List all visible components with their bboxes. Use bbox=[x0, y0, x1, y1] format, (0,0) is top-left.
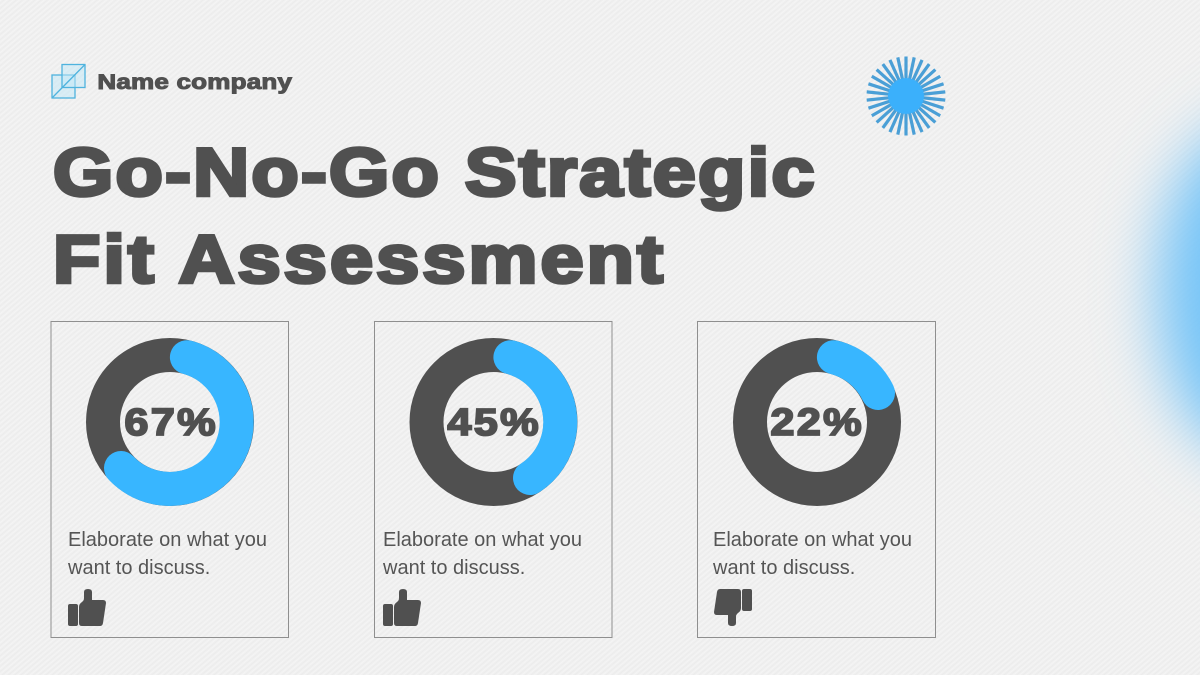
blue glow bbox=[1158, 120, 1200, 460]
description bbox=[382, 529, 582, 579]
donut chart: 22% bbox=[750, 355, 884, 489]
donut chart: 67% bbox=[103, 355, 237, 489]
title bbox=[53, 135, 815, 297]
company name: Name company bbox=[97, 71, 293, 94]
panel: 67% bbox=[51, 322, 288, 638]
description: Elaborate on what you bbox=[713, 529, 912, 551]
description: want to discuss. bbox=[382, 557, 525, 579]
description bbox=[712, 529, 912, 579]
panel: 45% bbox=[374, 322, 612, 638]
description bbox=[67, 529, 267, 579]
description: Elaborate on what you bbox=[383, 529, 582, 551]
title: Go-No-Go Strategic bbox=[53, 135, 815, 210]
donut chart: 22%: 22% bbox=[770, 400, 862, 443]
description: want to discuss. bbox=[67, 557, 210, 579]
donut chart: 45%: 45% bbox=[447, 400, 539, 443]
description: Elaborate on what you bbox=[68, 529, 267, 551]
title: Fit Assessment bbox=[53, 222, 663, 297]
description: want to discuss. bbox=[712, 557, 855, 579]
icon: thumbs up bbox=[68, 589, 106, 626]
icon: thumbs up bbox=[383, 589, 421, 626]
donut chart: 45% bbox=[426, 355, 560, 489]
logo icon bbox=[52, 64, 85, 98]
icon: thumbs down bbox=[714, 589, 752, 626]
donut chart: 67%: 67% bbox=[124, 400, 216, 443]
panel: 22% bbox=[698, 322, 936, 638]
sunburst icon bbox=[867, 56, 945, 136]
